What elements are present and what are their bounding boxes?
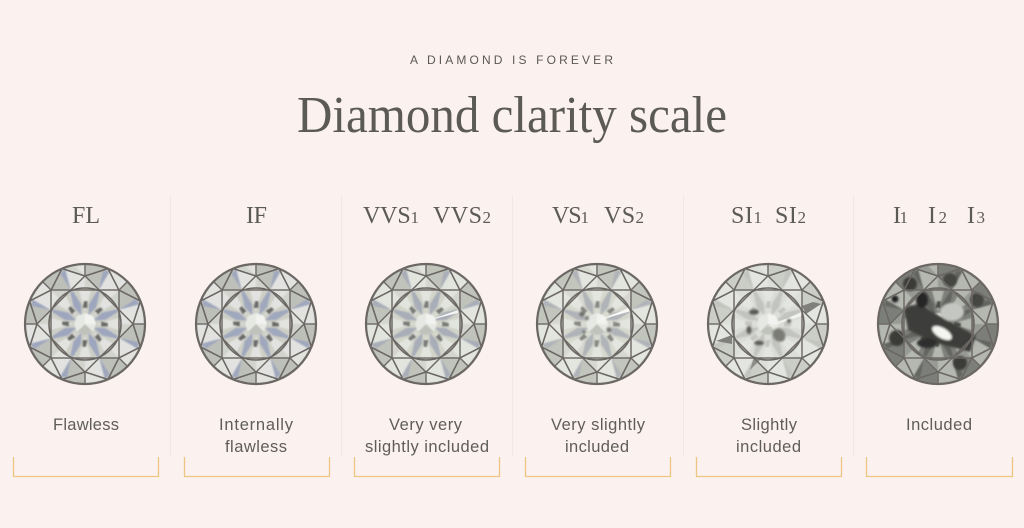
grade label VS: VS1 (552, 203, 589, 229)
description: Included (906, 416, 972, 434)
grade label I: I1 (893, 203, 908, 229)
grade label FL: FL (72, 203, 100, 229)
panel: FL (14, 203, 158, 476)
description: Very slightly (551, 416, 646, 434)
bracket (696, 457, 842, 476)
description: flawless (225, 438, 287, 456)
bracket (354, 457, 500, 476)
panel: SI (696, 203, 842, 476)
icon: very slightly included diamond (531, 258, 663, 390)
description: Slightly (741, 416, 798, 434)
panel: VS (526, 203, 670, 476)
panel: I (866, 203, 1012, 476)
icon: very very slightly included diamond (360, 258, 492, 390)
bracket (14, 457, 158, 476)
icon: included diamond (872, 258, 1004, 390)
description: Internally (219, 416, 294, 434)
grade label SI: SI1 (731, 203, 762, 229)
grade label I: I3 (967, 203, 985, 229)
description: included (565, 438, 629, 456)
title: Diamond clarity scale (297, 87, 727, 144)
description: Flawless (53, 416, 119, 434)
grade label VVS: VVS1 (363, 203, 419, 229)
panel: VVS (354, 203, 500, 476)
grade label IF: IF (246, 203, 267, 229)
bracket (526, 457, 670, 476)
icon: slightly included diamond (702, 258, 834, 390)
eyebrow text: A DIAMOND IS FOREVER (410, 53, 613, 67)
bracket (184, 457, 330, 476)
icon: internally flawless diamond (190, 258, 322, 390)
grade label SI: SI2 (775, 203, 806, 229)
grade label VS: VS2 (604, 203, 644, 229)
panel: IF (184, 203, 330, 476)
bracket (866, 457, 1012, 476)
icon: flawless diamond (19, 258, 151, 390)
grade label I: I2 (928, 203, 947, 229)
description: slightly included (365, 438, 489, 456)
description: Very very (389, 416, 463, 434)
grade label VVS: VVS2 (433, 203, 491, 229)
description: included (736, 438, 801, 456)
